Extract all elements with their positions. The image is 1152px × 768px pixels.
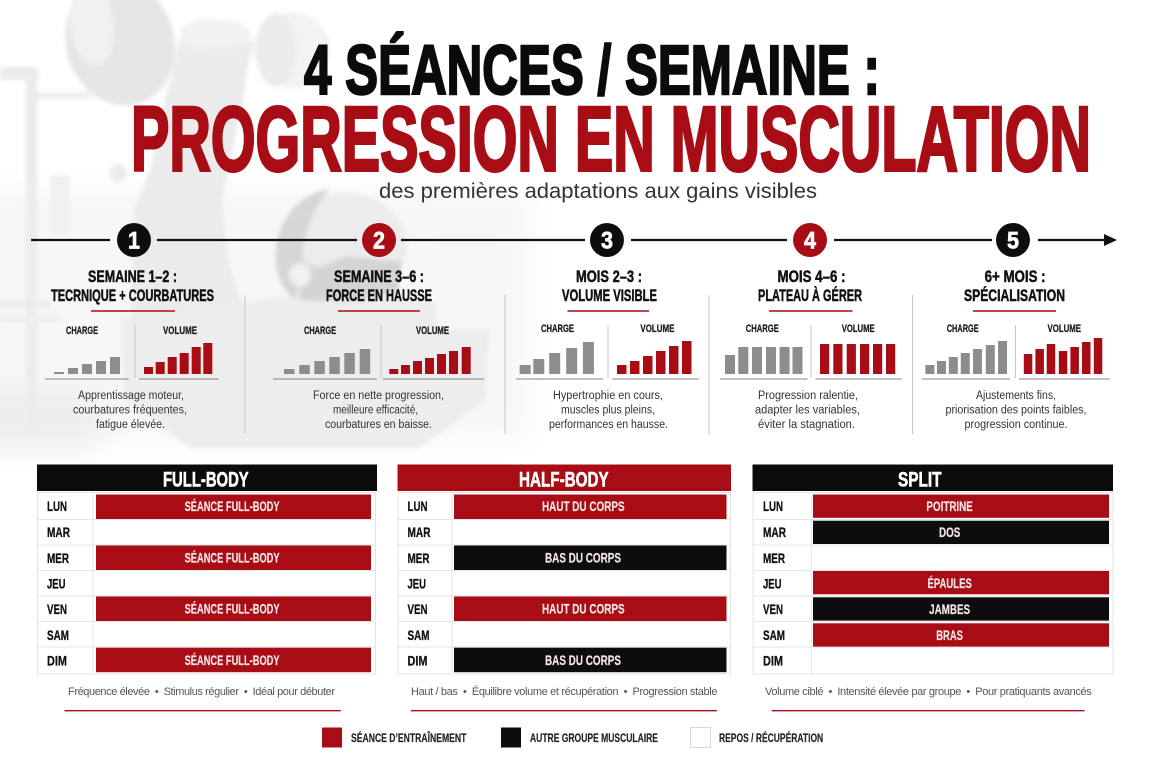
phase 2 chart: volume xyxy=(383,325,484,380)
phase 3 chart: charge xyxy=(516,323,603,380)
step 5 marker: 5 xyxy=(1007,228,1019,254)
torso xyxy=(120,296,490,448)
full-body day labels: DIM xyxy=(47,654,67,668)
half-body day labels: LUN xyxy=(408,499,428,514)
full-body session bars: SÉANCE FULL-BODY xyxy=(185,499,280,514)
phase 1: semaine 1-2 xyxy=(45,267,219,431)
split header: SPLIT xyxy=(898,468,942,492)
rack xyxy=(26,77,37,437)
phase 1 description: Apprentissage moteur, xyxy=(78,390,184,402)
phase 4 heading xyxy=(758,267,862,305)
phase 3 chart: volume xyxy=(612,323,699,380)
half-body header xyxy=(398,464,731,492)
title xyxy=(131,31,1091,203)
phase 3 heading: MOIS 2–3 : xyxy=(576,267,642,286)
full-body day labels: JEU xyxy=(47,576,66,592)
arrow head xyxy=(1104,234,1117,246)
phase 3 heading xyxy=(562,267,657,305)
phase 2 heading: FORCE EN HAUSSE xyxy=(326,286,432,305)
step 4 marker: 4 xyxy=(804,228,817,254)
step 1 marker xyxy=(117,223,151,257)
legend: rest xyxy=(690,728,823,748)
step 2 marker xyxy=(362,223,396,257)
split day labels: MAR xyxy=(763,525,786,540)
phase 5 heading xyxy=(964,267,1065,305)
full-body caption: Fréquence élevée • Stimulus régulier • Idéal pour débuter xyxy=(68,686,335,698)
half-body session bars: HAUT DU CORPS xyxy=(542,602,625,616)
phase 5 heading: SPÉCIALISATION xyxy=(964,286,1065,305)
full-body header: FULL-BODY xyxy=(163,468,249,492)
split session bars: POITRINE xyxy=(926,499,973,514)
split day labels: DIM xyxy=(763,654,783,668)
full-body day labels: MAR xyxy=(47,525,70,540)
phase 5 description: Ajustements fins, xyxy=(976,390,1056,402)
step 5 marker xyxy=(996,223,1030,257)
phase 4: mois 4-6 xyxy=(720,267,902,431)
phase 2 chart: volume: VOLUME xyxy=(416,325,449,337)
phase 5 chart: charge xyxy=(922,323,1010,380)
full-body day labels: SAM xyxy=(47,628,69,643)
phase 5: 6+ mois xyxy=(922,267,1110,431)
phase 1 heading xyxy=(51,267,214,305)
phase 3 description xyxy=(549,390,668,431)
plate xyxy=(50,0,190,118)
beard xyxy=(296,256,402,302)
half-body day labels xyxy=(408,499,431,668)
split session bars: BRAS xyxy=(936,628,963,643)
split day labels: VEN xyxy=(763,602,783,617)
legend: training session: SÉANCE D’ENTRAÎNEMENT xyxy=(351,732,466,745)
phase 4 description: Progression ralentie, xyxy=(758,390,858,402)
split day labels: SAM xyxy=(763,628,785,643)
phase 1 heading: TECRNIQUE + COURBATURES xyxy=(51,286,214,305)
step 3 marker xyxy=(590,223,624,257)
phase 5 heading: 6+ MOIS : xyxy=(985,267,1046,286)
legend xyxy=(322,728,823,748)
full-body day labels: VEN xyxy=(47,602,67,617)
legend: training session xyxy=(322,728,466,748)
half-body day labels: DIM xyxy=(408,654,428,668)
phase 3 chart: charge: CHARGE xyxy=(541,323,574,335)
phase 4 description xyxy=(755,390,860,431)
split session bars: JAMBES xyxy=(929,602,970,617)
half-body header: HALF-BODY xyxy=(519,468,609,492)
full-body day labels: MER xyxy=(47,551,69,566)
phase 2 description: Force en nette progression, xyxy=(313,390,444,402)
phase 1 chart: charge: CHARGE xyxy=(66,325,98,337)
subtitle: des premières adaptations aux gains visibles xyxy=(379,180,817,203)
phase 5 chart: charge: CHARGE xyxy=(947,323,979,335)
arm xyxy=(130,38,254,340)
phase 4 chart: volume: VOLUME xyxy=(842,323,875,335)
legend: other muscle group: AUTRE GROUPE MUSCULAIRE xyxy=(530,733,658,745)
panel: full-body schedule xyxy=(37,464,377,711)
phase 1 description xyxy=(73,390,187,431)
half-body session bars: BAS DU CORPS xyxy=(545,653,621,668)
full-body session bars: SÉANCE FULL-BODY xyxy=(185,653,280,668)
phase 4 chart: charge: CHARGE xyxy=(746,323,779,335)
panel: split schedule xyxy=(752,464,1113,711)
full-body session bars xyxy=(96,494,371,672)
full-body session bars: SÉANCE FULL-BODY xyxy=(185,550,280,566)
far plate xyxy=(254,12,330,88)
half-body session bars: HAUT DU CORPS xyxy=(542,499,625,514)
half-body session bars: BAS DU CORPS xyxy=(545,550,621,566)
step 2 marker: 2 xyxy=(373,228,385,254)
half-body day labels: JEU xyxy=(408,576,426,592)
phase 5 chart: volume: VOLUME xyxy=(1048,323,1081,335)
phase 1 heading: SEMAINE 1–2 : xyxy=(88,267,177,286)
phase 5 description: progression continue. xyxy=(964,419,1068,431)
phase 3 description: muscles plus pleins, xyxy=(561,404,655,416)
phase 5 description: priorisation des points faibles, xyxy=(946,404,1086,416)
phase 5 chart: volume xyxy=(1019,323,1110,380)
phase 1 description: fatigue élevée. xyxy=(96,419,165,431)
panel: half-body schedule xyxy=(398,464,731,711)
split caption: Volume ciblé • Intensité élevée par groupe • Pour pratiquants avancés xyxy=(765,686,1092,698)
phase 2 chart: charge xyxy=(273,325,377,380)
phase 1 description: courbatures fréquentes, xyxy=(73,404,187,416)
full-body session bars: SÉANCE FULL-BODY xyxy=(185,602,280,616)
timeline xyxy=(31,223,1117,257)
phase 2 heading xyxy=(326,267,432,305)
split day labels xyxy=(763,499,786,668)
phase 1 chart: charge xyxy=(45,325,129,380)
split session bars: DOS xyxy=(939,525,960,540)
phase 2 description: courbatures en baisse. xyxy=(325,419,432,431)
phase 4 heading: PLATEAU À GÉRER xyxy=(758,286,862,305)
step 3 marker: 3 xyxy=(601,228,613,254)
phase 2 description: meilleure efficacité, xyxy=(333,404,418,416)
phase 3 heading: VOLUME VISIBLE xyxy=(562,286,657,305)
phase 4 description: éviter la stagnation. xyxy=(758,419,855,431)
split session bars: ÉPAULES xyxy=(928,576,972,591)
half-body day labels: SAM xyxy=(408,628,430,643)
phase 5 description xyxy=(946,390,1086,431)
full-body day labels xyxy=(47,499,70,668)
phase 1 chart: volume xyxy=(139,325,219,380)
step 4 marker xyxy=(793,223,827,257)
full-body day labels: LUN xyxy=(47,499,67,514)
phase 3 description: performances en hausse. xyxy=(549,419,668,431)
split day labels: MER xyxy=(763,551,785,566)
full-body header xyxy=(37,464,377,492)
head xyxy=(283,193,407,297)
title line 1: 4 SÉANCES / SEMAINE : xyxy=(304,31,880,109)
half-body day labels: VEN xyxy=(408,602,428,617)
legend: rest: REPOS / RÉCUPÉRATION xyxy=(719,732,823,745)
far arm xyxy=(436,210,491,330)
phase 4 description: adapter les variables, xyxy=(755,404,860,416)
half-body day labels: MAR xyxy=(408,525,431,540)
hand xyxy=(180,18,254,50)
phase 1 chart: volume: VOLUME xyxy=(163,325,197,337)
phase 2: semaine 3-6 xyxy=(273,267,484,431)
legend: other muscle group xyxy=(501,728,658,748)
phase 3 chart: volume: VOLUME xyxy=(640,323,674,335)
step 1 marker: 1 xyxy=(128,228,140,254)
phase 3: mois 2-3 xyxy=(516,267,699,431)
phase 2 description xyxy=(313,390,444,431)
split day labels: LUN xyxy=(763,499,783,514)
phase 4 chart: charge xyxy=(720,323,808,380)
phase 4 heading: MOIS 4–6 : xyxy=(778,267,846,286)
half-body caption: Haut / bas • Équilibre volume et récupération • Progression stable xyxy=(411,685,718,698)
phase 2 chart: charge: CHARGE xyxy=(304,325,336,337)
half-body day labels: MER xyxy=(408,551,430,566)
split session bars xyxy=(813,494,1109,647)
split header xyxy=(752,464,1113,492)
phase 4 chart: volume xyxy=(815,323,902,380)
phase 2 heading: SEMAINE 3–6 : xyxy=(334,267,424,286)
split day labels: JEU xyxy=(763,576,782,592)
phase 3 description: Hypertrophie en cours, xyxy=(553,390,663,402)
half-body session bars xyxy=(454,494,726,672)
